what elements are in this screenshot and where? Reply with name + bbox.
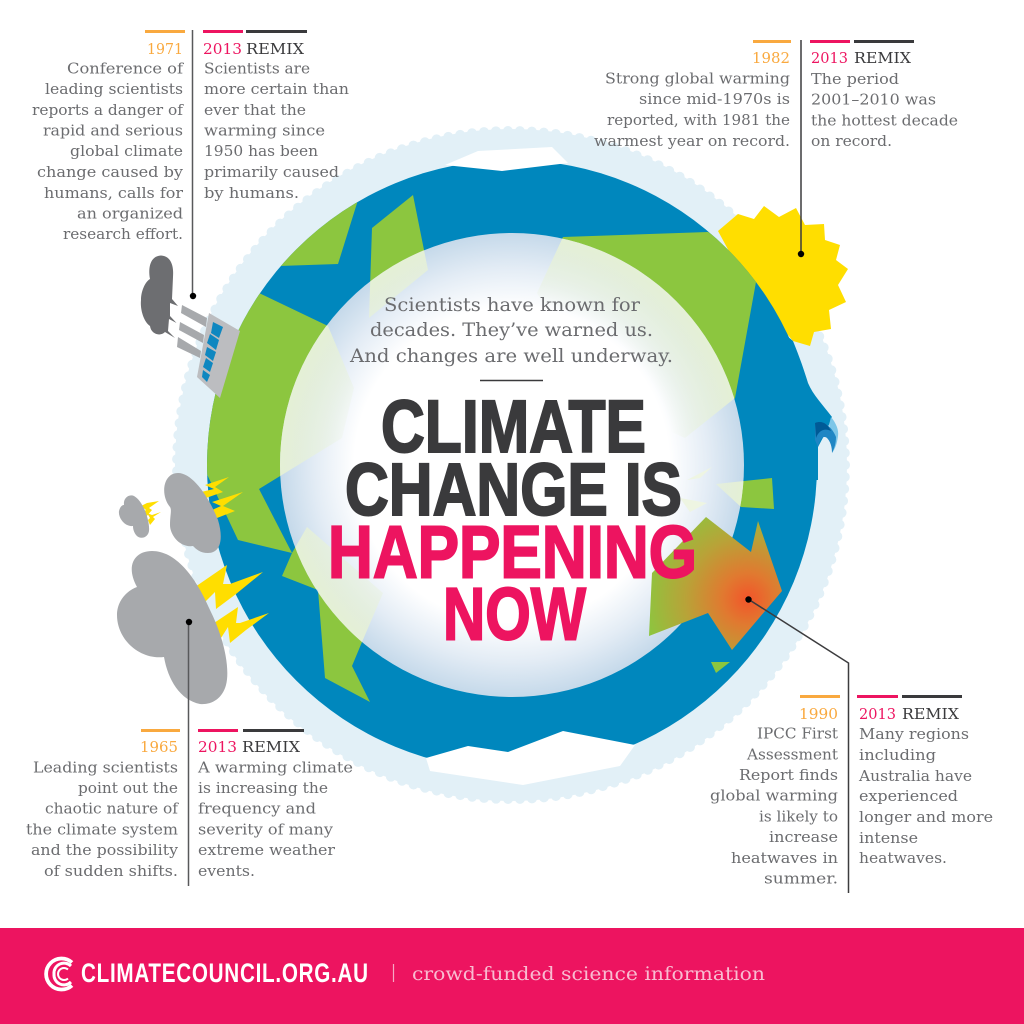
callout 1971: warming since [204, 122, 325, 140]
callout 1971: 1971 [147, 40, 183, 58]
callout 1982: 2013 [811, 49, 848, 67]
callout 1990: including [859, 747, 936, 764]
callout 1990: is likely to [759, 808, 838, 826]
callout 1990: summer. [764, 870, 838, 888]
callout 1982: since mid-1970s is [639, 91, 790, 108]
callout 1971: Conference of [67, 60, 185, 78]
callout 1990: heatwaves. [859, 850, 947, 867]
callout 1965: Leading scientists [33, 760, 178, 776]
building [197, 313, 240, 398]
callout 1965: of sudden shifts. [44, 863, 178, 880]
icon: Climate Council logo [46, 958, 72, 989]
footer tagline: crowd-funded science information [412, 963, 765, 985]
callout 1982 [594, 40, 958, 150]
callout 1965: events. [198, 863, 255, 880]
leader line 1971 [190, 30, 196, 299]
intro text: Scientists have known for [384, 295, 640, 316]
footer band [0, 928, 1024, 1024]
icon: wave [815, 417, 838, 453]
callout 1971: humans, calls for [44, 185, 183, 202]
icon: sun [718, 206, 848, 346]
callout 1990: 1990 [799, 705, 838, 723]
globe atmosphere haze [175, 129, 847, 801]
intro text: And changes are well underway. [349, 346, 673, 367]
title [328, 385, 697, 656]
callout 1990: experienced [859, 788, 958, 805]
polar ice top [445, 147, 568, 171]
callout 1971: global climate [70, 143, 183, 160]
callout 1971: primarily caused [204, 164, 339, 181]
leader line 1990 [745, 596, 848, 893]
callout 1971 [32, 30, 349, 243]
callout 1990: IPCC First [757, 726, 838, 742]
callout 1965: the climate system [26, 822, 178, 838]
callout 1971: change caused by [37, 164, 184, 181]
faint land shards [680, 467, 712, 512]
callout 1971: 1950 has been [204, 143, 318, 160]
continents seen through glow [280, 238, 744, 642]
callout 1990: REMIX [902, 705, 959, 723]
callout 1971: reports a danger of [32, 102, 185, 119]
callout 1990: global warming [710, 788, 838, 804]
callout 1971: research effort. [63, 226, 183, 243]
callout 1965: extreme weather [198, 842, 335, 859]
footer url: CLIMATECOUNCIL.ORG.AU [81, 959, 368, 989]
windows [202, 322, 223, 382]
callout 1971: by humans. [204, 185, 299, 202]
icon: factory [141, 256, 240, 398]
callout 1990: 2013 [859, 705, 896, 723]
callout 1971: leading scientists [45, 81, 183, 98]
callout 1965: chaotic nature of [45, 800, 180, 818]
callout 1990: intense [859, 830, 918, 847]
title: CHANGE IS [345, 448, 682, 531]
callout 1990: Report finds [739, 767, 838, 784]
callout 1982: 1982 [752, 49, 790, 67]
callout 1965: point out the [78, 780, 178, 797]
callout 1990: Assessment [746, 746, 838, 764]
callout 1965: A warming climate [197, 760, 353, 776]
callout 1982: warmest year on record. [594, 133, 790, 150]
title: NOW [443, 572, 587, 656]
smoke [141, 256, 178, 338]
callout 1990: longer and more [859, 809, 993, 826]
callout 1990: Australia have [858, 768, 972, 785]
callout 1965 [26, 729, 353, 880]
Tasmania [711, 662, 730, 673]
callout 1990: Many regions [859, 726, 969, 743]
callout 1965: 2013 [198, 738, 237, 756]
small cloud [119, 495, 149, 538]
leader line 1965 [186, 619, 192, 886]
chimneys [177, 305, 207, 358]
icon: storm clouds [117, 473, 269, 704]
callout 1990 [710, 695, 993, 888]
big cloud [117, 551, 227, 704]
callout 1971: REMIX [246, 40, 304, 58]
callout 1990: heatwaves in [731, 850, 838, 867]
callout 1982: 2001–2010 was [811, 92, 936, 108]
globe [190, 147, 832, 785]
inner glow [280, 233, 744, 697]
callout 1982: Strong global warming [605, 70, 790, 88]
title: HAPPENING [328, 510, 697, 594]
intro text: decades. They’ve warned us. [370, 320, 653, 341]
callout 1971: 2013 [203, 40, 242, 58]
leader line 1982 [798, 40, 804, 257]
callout 1990: increase [769, 829, 838, 846]
Australia with heat spot [649, 517, 782, 650]
callout 1982: The period [811, 71, 899, 88]
footer divider [392, 964, 394, 982]
continents on ocean [190, 195, 774, 702]
callout 1982: reported, with 1981 the [607, 112, 790, 129]
polar ice bottom [426, 731, 635, 785]
callout 1971: an organized [77, 206, 183, 222]
callout 1982: REMIX [854, 49, 911, 67]
lightning [141, 477, 269, 643]
title: CLIMATE [381, 385, 646, 468]
callout 1965: severity of many [198, 822, 334, 838]
callout 1971: Scientists are [204, 60, 310, 78]
intro text [349, 295, 673, 367]
callout 1965: and the possibility [31, 842, 179, 859]
ocean [207, 160, 832, 770]
middle cloud [164, 473, 221, 553]
callout 1965: 1965 [140, 738, 178, 756]
callout 1982: on record. [811, 133, 892, 150]
callout 1971: rapid and serious [43, 122, 183, 140]
callout 1965: frequency and [198, 800, 316, 818]
callout 1982: the hottest decade [811, 112, 958, 130]
callout 1965: is increasing the [198, 780, 328, 797]
callout 1971: ever that the [204, 102, 306, 119]
callout 1965: REMIX [242, 738, 300, 756]
callout 1971: more certain than [204, 81, 349, 98]
divider rule [480, 380, 543, 382]
